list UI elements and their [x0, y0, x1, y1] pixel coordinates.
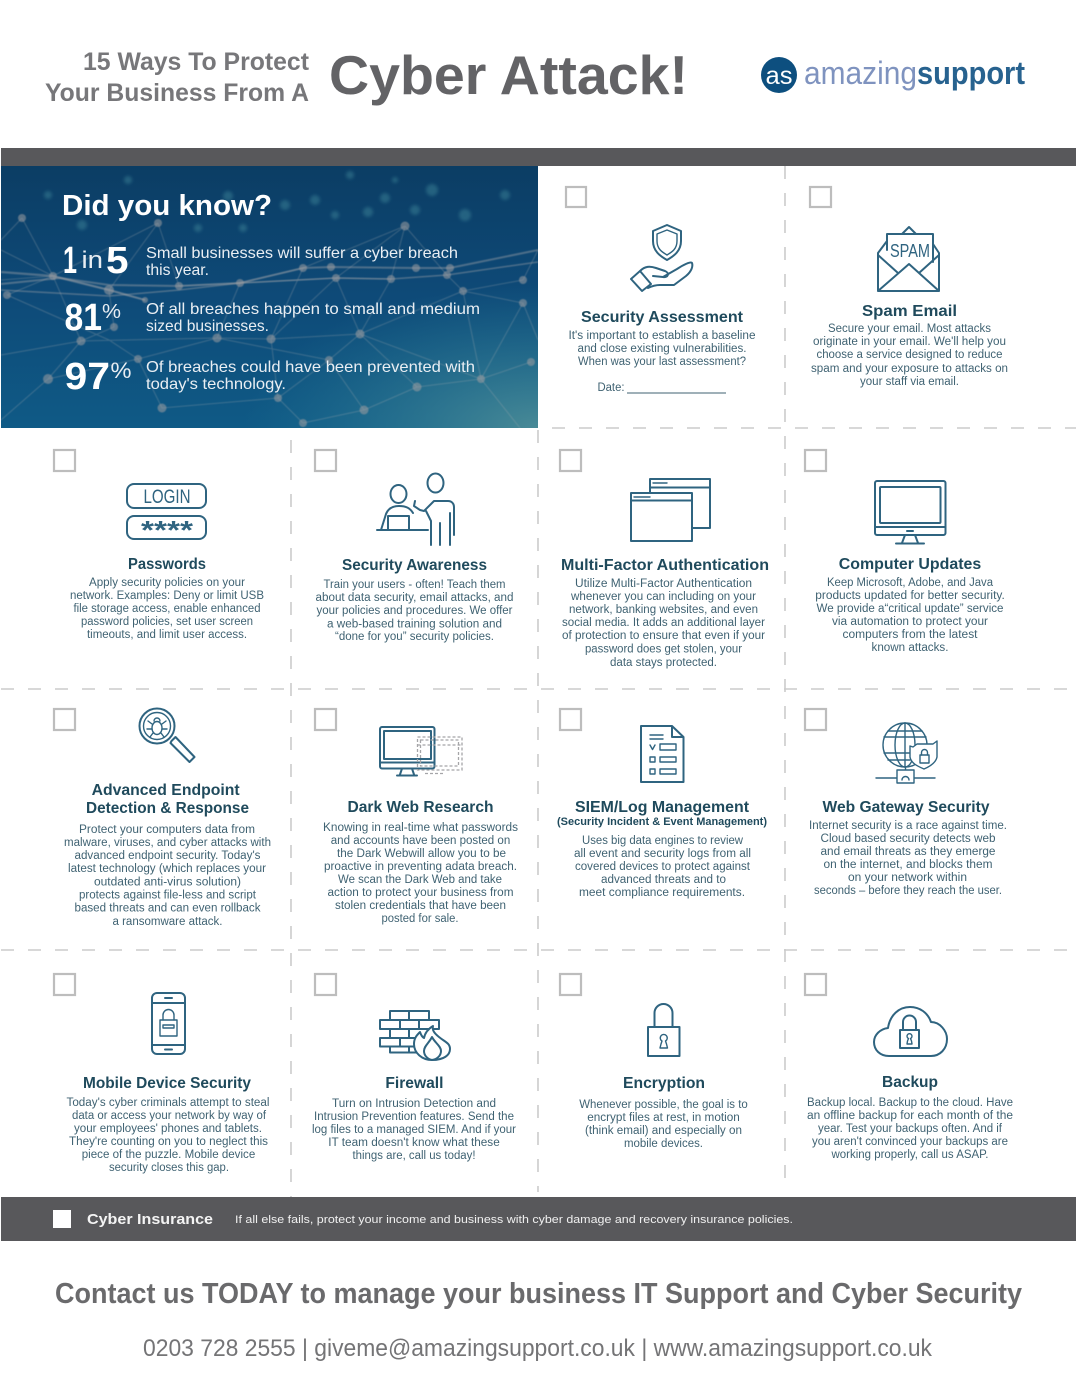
panel: multi-factor authentication: [560, 450, 769, 669]
checkbox: [560, 974, 581, 995]
stat: 97%: %: [110, 358, 132, 383]
body text: a ransomware attack.: [112, 916, 222, 928]
icon: cloud with lock: [874, 1007, 947, 1056]
checkbox: [560, 450, 581, 471]
contact headline: Contact us TODAY to manage your business IT Support and Cyber Security: [55, 1278, 1022, 1310]
body text: protects against file-less and script: [79, 890, 257, 902]
heading: Spam Email: [862, 303, 957, 320]
body text: Whenever possible, the goal is to: [579, 1099, 748, 1111]
body text: security closes this gap.: [109, 1162, 229, 1174]
heading: Dark Web Research: [348, 799, 494, 816]
stat: 1 in 5: 1: [63, 240, 77, 282]
stat: 1 in 5: this year.: [146, 262, 209, 279]
panel: security assessment: [566, 187, 756, 394]
panel: backup: [805, 974, 1013, 1161]
body text: When was your last assessment?: [578, 356, 746, 368]
checkbox: [53, 1210, 71, 1228]
body text: Protect your computers data from: [79, 824, 255, 836]
checkbox: [54, 450, 75, 471]
checkbox: [805, 450, 826, 471]
body text: [323, 822, 518, 925]
body text: whenever you can including on your: [570, 591, 756, 603]
body text: on the internet, and blocks them: [824, 859, 992, 871]
icon: bug under magnifier: [140, 708, 194, 762]
panel: spam email: [810, 187, 1008, 388]
body text: known attacks.: [872, 642, 948, 654]
panel: dark web research: [315, 709, 518, 925]
icon: login form: [127, 484, 206, 545]
stat: 1 in 5: [63, 240, 458, 282]
icon: spam envelope: [878, 227, 939, 291]
body text: IT team doesn't know what these: [328, 1137, 500, 1149]
body text: of protection to ensure that even if your: [562, 630, 765, 642]
panel: security awareness: [315, 450, 514, 643]
body text: network. Examples: Deny or limit USB: [70, 590, 264, 602]
heading: Encryption: [623, 1075, 705, 1092]
body text: on your network within: [848, 872, 967, 884]
body text: Today's cyber criminals attempt to steal: [66, 1097, 270, 1109]
header title: 15 Ways To Protect: [83, 48, 310, 76]
body text: your employees' phones and tablets.: [74, 1123, 262, 1135]
icon: globe with shield: [876, 723, 937, 783]
body text: [574, 835, 751, 899]
checkbox: [805, 974, 826, 995]
panel: mobile device security: [54, 974, 270, 1174]
body text: “done for you” security policies.: [335, 631, 494, 643]
logo: amazing support: support: [917, 55, 1025, 91]
body text: They're counting on you to neglect this: [69, 1136, 268, 1148]
icon: monitor: [875, 481, 946, 544]
icon: spam envelope: SPAM: [890, 241, 930, 261]
panel: firewall: [312, 974, 516, 1162]
body text: Cloud based security detects web: [820, 833, 996, 845]
body text: originate in your email. We'll help you: [813, 336, 1006, 348]
body text: products updated for better security.: [815, 590, 1005, 602]
body text: Uses big data engines to review: [582, 835, 744, 847]
body text: covered devices to protect against: [575, 861, 751, 873]
body text: [568, 330, 756, 394]
body text: data stays protected.: [610, 657, 717, 669]
panel: web gateway security: [805, 709, 1007, 897]
body text: Intrusion Prevention features. Send the: [314, 1111, 514, 1123]
panel: passwords: [54, 450, 264, 641]
body text: Turn on Intrusion Detection and: [332, 1098, 496, 1110]
checkbox: [560, 709, 581, 730]
body text: and email threats as they emerge: [820, 846, 996, 858]
logo: amazing support: [761, 55, 1025, 93]
heading: Advanced Endpoint: [92, 782, 240, 799]
heading: Computer Updates: [839, 556, 981, 573]
stat: 1 in 5: in: [82, 247, 103, 274]
band text: If all else fails, protect your income and business with cyber damage and recovery insurance policies.: [235, 1214, 793, 1226]
body text: posted for sale.: [382, 913, 458, 925]
body text: things are, call us today!: [352, 1150, 476, 1162]
checkbox: [810, 187, 831, 207]
body text: [579, 1099, 748, 1150]
body text: [562, 578, 765, 669]
checkbox: [315, 974, 336, 995]
panel heading: Did you know?: [62, 190, 272, 222]
stat: 81%: sized businesses.: [146, 318, 269, 335]
body text: [807, 1097, 1013, 1161]
logo: amazing support: amazing: [804, 55, 917, 91]
body text: file storage access, enable enhanced: [74, 603, 260, 615]
body text: stolen credentials that have been: [335, 900, 506, 912]
body text: choose a service designed to reduce: [816, 349, 1002, 361]
icon: shield in hand: [631, 225, 692, 291]
body text: malware, viruses, and cyber attacks with: [64, 837, 271, 849]
body text: Apply security policies on your: [89, 577, 245, 589]
top dark band: [1, 148, 1076, 166]
body text: [312, 1098, 516, 1162]
stat: 97%: [64, 356, 475, 398]
body text: Secure your email. Most attacks: [828, 323, 991, 335]
body text: [815, 577, 1005, 654]
body text: about data security, email attacks, and: [316, 592, 514, 604]
body text: [70, 577, 264, 641]
contact details: 0203 728 2555 | giveme@amazingsupport.co.uk | www.amazingsupport.co.uk: [143, 1335, 933, 1362]
body text: and close existing vulnerabilities.: [578, 343, 746, 355]
body text: password does get stolen, your: [585, 644, 742, 656]
body text: action to protect your business from: [328, 887, 514, 899]
body text: We scan the Dark Web and take: [338, 874, 502, 886]
icon: checklist document: [641, 726, 684, 782]
body text: a web-based training solution and: [327, 618, 502, 630]
body text: Utilize Multi-Factor Authentication: [575, 578, 752, 590]
body text: encrypt files at rest, in motion: [587, 1112, 740, 1124]
heading: SIEM/Log Management: [575, 799, 750, 816]
body text: an offline backup for each month of the: [807, 1110, 1013, 1122]
stat: 81%: [64, 297, 480, 339]
body text: working properly, call us ASAP.: [831, 1149, 988, 1161]
body text: meet compliance requirements.: [579, 887, 745, 899]
icon: login form: LOGIN: [144, 487, 190, 508]
heading: Backup: [882, 1074, 938, 1091]
body text: Train your users - often! Teach them: [324, 579, 506, 591]
icon: brick wall with flame: [380, 1011, 450, 1060]
body text: latest technology (which replaces your: [68, 863, 266, 875]
heading: [86, 782, 249, 817]
date line: [627, 392, 726, 394]
stat: 81%: Of all breaches happen to small and medium: [146, 301, 480, 318]
body text: [811, 323, 1008, 388]
checkbox: [54, 709, 75, 730]
body text: year. Test your backups often. And if: [818, 1123, 1003, 1135]
logo: amazing support: as: [766, 62, 792, 90]
stat: 81%: 81: [64, 297, 102, 339]
body text: social media. It adds an additional layer: [562, 617, 765, 629]
body text: your staff via email.: [860, 376, 959, 388]
header title: [45, 44, 688, 107]
body text: Knowing in real-time what passwords: [323, 822, 518, 834]
icon: trainer and seated person: [377, 474, 454, 545]
checkbox: [805, 709, 826, 730]
panel: encryption: [560, 974, 748, 1150]
body text: [64, 824, 271, 928]
panel: cyber insurance band: [1, 1197, 1076, 1241]
body text: all event and security logs from all: [574, 848, 751, 860]
icon: monitor with hidden window: [380, 727, 462, 776]
body text: data or access your network by way of: [72, 1110, 267, 1122]
body text: you aren't convinced your backups are: [812, 1136, 1008, 1148]
header title: Your Business From A: [45, 79, 309, 107]
body text: seconds – before they reach the user.: [814, 885, 1002, 897]
body text: spam and your exposure to attacks on: [811, 363, 1008, 375]
body text: It's important to establish a baseline: [568, 330, 756, 342]
heading: Multi-Factor Authentication: [561, 557, 769, 574]
body text: mobile devices.: [624, 1138, 703, 1150]
stat: 97%: 97: [64, 356, 110, 398]
body text: timeouts, and limit user access.: [87, 629, 247, 641]
body text: Date:: [598, 382, 624, 394]
heading: Security Awareness: [342, 557, 487, 574]
body text: outdated anti-virus solution): [94, 876, 241, 888]
subheading: (Security Incident & Event Management): [557, 816, 767, 828]
checkbox: [315, 450, 336, 471]
header title: Cyber Attack!: [329, 44, 688, 106]
body text: proactive in preventing adata breach.: [324, 861, 517, 873]
body text: and accounts have been posted on: [331, 835, 510, 847]
checkbox: [566, 187, 586, 207]
body text: piece of the puzzle. Mobile device: [82, 1149, 255, 1161]
body text: (think email) and especially on: [585, 1125, 742, 1137]
icon: browser windows: [631, 479, 710, 541]
body text: based threats and can even rollback: [74, 902, 261, 914]
stat: 1 in 5: Small businesses will suffer a cyber breach: [146, 245, 458, 262]
body text: your policies and procedures. We offer: [316, 605, 513, 617]
body text: Keep Microsoft, Adobe, and Java: [827, 577, 994, 589]
icon: phone with lock: [152, 993, 185, 1054]
heading: Web Gateway Security: [822, 799, 990, 816]
checkbox: [54, 974, 75, 995]
body text: password policies, set user screen: [81, 616, 253, 628]
body text: computers from the latest: [842, 629, 978, 641]
heading: Passwords: [128, 556, 206, 573]
stat: 1 in 5: 5: [106, 240, 128, 282]
body text: advanced endpoint security. Today's: [74, 850, 261, 862]
heading: Firewall: [385, 1075, 443, 1092]
body text: network, banking websites, and even: [569, 604, 758, 616]
stat: 97%: today's technology.: [146, 376, 286, 393]
stat: 81%: %: [102, 301, 121, 323]
icon: login form: ****: [141, 515, 194, 545]
body text: log files to a managed SIEM. And if your: [312, 1124, 516, 1136]
body text: [66, 1097, 270, 1174]
body text: Backup local. Backup to the cloud. Have: [807, 1097, 1013, 1109]
panel: computer updates: [805, 450, 1005, 654]
heading: Security Assessment: [581, 309, 744, 326]
heading: Mobile Device Security: [83, 1075, 251, 1092]
panel: did you know: [1, 166, 538, 428]
body text: [316, 579, 514, 643]
icon: padlock: [648, 1004, 680, 1056]
body text: the Dark Webwill allow you to be: [337, 848, 506, 860]
panel: advanced endpoint detection and response: [54, 708, 271, 928]
body text: We provide a“critical update” service: [816, 603, 1004, 615]
body text: [809, 820, 1007, 897]
stat: 97%: Of breaches could have been prevented with: [146, 359, 475, 376]
panel: siem and log management: [557, 709, 767, 899]
body text: via automation to protect your: [832, 616, 988, 628]
body text: advanced threats and to: [601, 874, 726, 886]
heading: Detection & Response: [86, 800, 249, 817]
band heading: Cyber Insurance: [87, 1211, 213, 1228]
checkbox: [315, 709, 336, 730]
body text: Internet security is a race against time.: [809, 820, 1007, 832]
